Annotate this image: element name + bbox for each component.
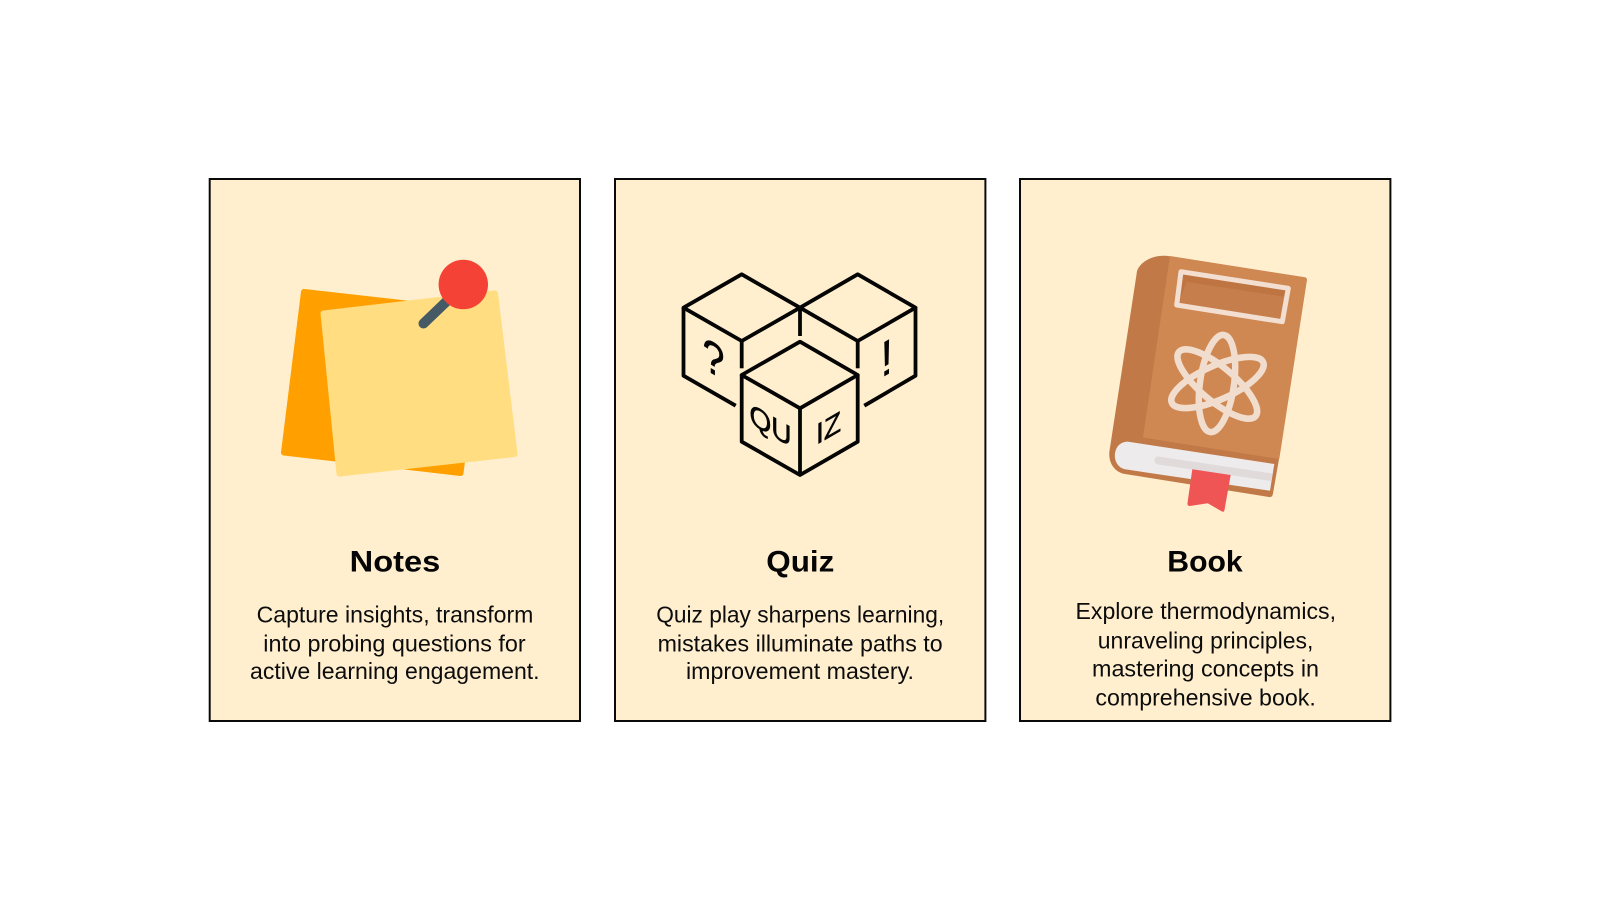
icon: physics book — [1109, 256, 1307, 512]
text block: notes description: Capture insights, transform — [257, 601, 533, 627]
text block: notes description: active learning engagement. — [250, 658, 540, 684]
text block: book description: mastering concepts in — [1092, 656, 1319, 682]
heading: Notes: Notes — [350, 546, 440, 579]
icon: sticky notes with pin — [284, 260, 514, 474]
icon: quiz cubes: IZ — [816, 405, 841, 451]
text block: quiz description: improvement mastery. — [686, 658, 914, 684]
text block: book description — [1076, 598, 1336, 710]
text block: notes description: into probing questions for — [263, 630, 526, 656]
text block: book description: comprehensive book. — [1095, 684, 1316, 710]
heading: Book: Book — [1167, 546, 1243, 579]
text block: book description: Explore thermodynamics, — [1076, 598, 1336, 624]
icon: quiz cubes: ? — [702, 326, 724, 391]
panel: book — [1020, 179, 1390, 721]
panel: notes — [210, 179, 580, 721]
icon: quiz cubes — [684, 274, 916, 475]
icon: quiz cubes: ! — [880, 327, 894, 390]
heading: Quiz: Quiz — [766, 546, 834, 579]
text block: quiz description: Quiz play sharpens learning, — [656, 601, 944, 627]
text block: book description: unraveling principles, — [1098, 627, 1313, 653]
text block: notes description — [250, 601, 540, 684]
text block: quiz description — [656, 601, 944, 684]
text block: quiz description: mistakes illuminate paths to — [658, 630, 943, 656]
panel: quiz — [615, 179, 985, 721]
icon: quiz cubes: QU — [750, 397, 792, 454]
